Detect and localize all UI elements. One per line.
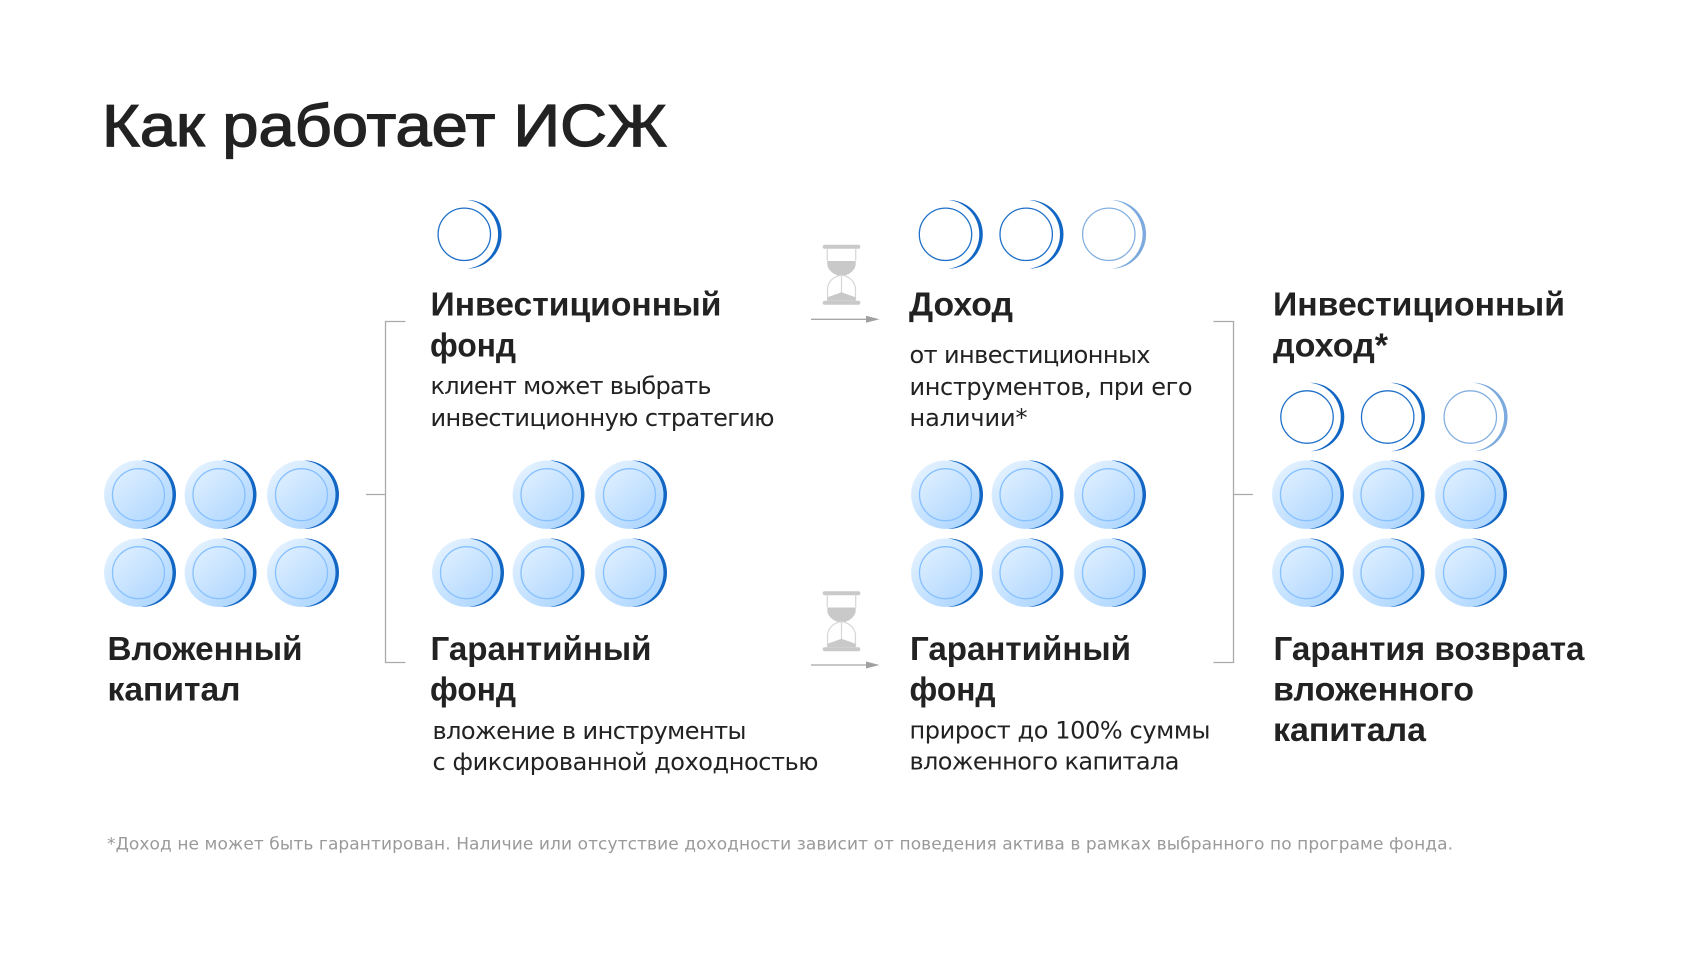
panel: capital guarantee — [1272, 460, 1585, 748]
heading: investment income — [1273, 286, 1565, 364]
text: investment fund — [430, 372, 774, 432]
heading: capital guarantee: капитала — [1273, 711, 1427, 748]
heading: investment income: Инвестиционный — [1273, 286, 1565, 322]
heading: investment income: доход* — [1273, 326, 1388, 364]
heading: investment fund: фонд — [430, 326, 516, 364]
heading: investment fund — [430, 286, 722, 364]
panel: investment income — [1273, 286, 1565, 451]
panel: guarantee fund growth — [910, 460, 1210, 776]
text: income: наличии* — [910, 404, 1028, 432]
coins: guarantee fund — [432, 460, 667, 607]
text: guarantee fund growth — [910, 716, 1210, 776]
heading: guarantee fund: фонд — [430, 670, 516, 708]
panel: guarantee fund — [430, 460, 818, 776]
heading: invested capital — [108, 630, 302, 708]
heading: guarantee fund growth: Гарантийный — [910, 630, 1131, 667]
text: guarantee fund growth: прирост до 100% суммы — [910, 716, 1210, 744]
footnote: *Доход не может быть гарантирован. Наличие или отсутствие доходности зависит от поведения актива в рамках выбранного по програме фонда. — [107, 834, 1453, 854]
icon: hourglass top — [823, 245, 860, 305]
heading: guarantee fund — [430, 630, 652, 708]
arrow bottom — [811, 662, 880, 668]
text: guarantee fund: вложение в инструменты — [432, 717, 746, 745]
icon: hollow coin — [438, 200, 502, 269]
text: guarantee fund growth: вложенного капитала — [910, 748, 1180, 776]
icon: hourglass bottom — [823, 591, 860, 651]
text: guarantee fund — [432, 717, 818, 776]
text: investment fund: инвестиционную стратегию — [430, 404, 774, 432]
text: investment fund: клиент может выбрать — [430, 372, 712, 400]
coins: guarantee fund growth — [911, 460, 1146, 607]
heading: capital guarantee — [1273, 630, 1585, 748]
heading: guarantee fund: Гарантийный — [430, 630, 652, 667]
text: guarantee fund: с фиксированной доходностью — [432, 748, 818, 776]
text: income: от инвестиционных — [910, 341, 1150, 369]
heading: invested capital: Вложенный — [108, 630, 302, 667]
icons: hollow coins income — [919, 200, 1146, 269]
panel: investment fund — [430, 200, 774, 432]
heading: capital guarantee: вложенного — [1273, 670, 1474, 708]
coins: capital guarantee — [1272, 460, 1507, 607]
heading: invested capital: капитал — [108, 670, 240, 708]
arrow top — [811, 316, 880, 323]
panel: invested capital — [104, 460, 339, 708]
heading: guarantee fund growth — [910, 630, 1131, 708]
heading: guarantee fund growth: фонд — [910, 670, 996, 708]
text: income: инструментов, при его — [910, 373, 1192, 401]
heading: capital guarantee: Гарантия возврата — [1274, 630, 1585, 667]
heading: income: Доход — [909, 286, 1013, 322]
icons: hollow coins investment income — [1281, 383, 1508, 451]
text: income — [910, 341, 1192, 432]
coins: invested capital — [104, 460, 339, 607]
right bracket — [1214, 322, 1253, 662]
panel: income — [909, 200, 1192, 432]
left bracket — [366, 322, 406, 662]
heading: investment fund: Инвестиционный — [430, 286, 722, 322]
title: Как работает ИСЖ — [102, 93, 667, 159]
